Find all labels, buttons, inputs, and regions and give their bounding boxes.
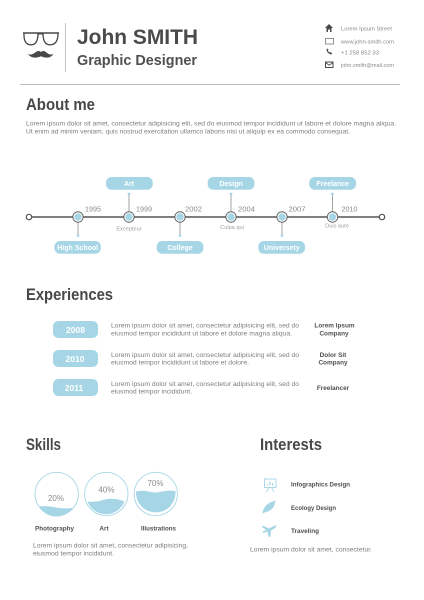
heading: about me: About me [26,96,95,114]
timeline years [85,204,358,214]
about text: Ut enim ad minim veniam, quis nostrud exercitation ullamco laboris nisi ut aliquip ex ea commodo consequat. [26,128,350,136]
pill: freelance [309,177,356,190]
interests list [262,479,350,537]
timeline years: 2010 [342,204,358,214]
experience 2010: eiusmod tempor incididunt ut labore et dolore. [111,360,249,366]
skill: illustrations 70% [134,472,178,532]
pill: design [208,177,254,190]
contact: website: www.john-smith.com [340,40,394,46]
experience 2008: eiusmod tempor incididunt ut labore et dolore magna aliqua. [111,330,292,337]
timeline axis [31,216,380,218]
experience 2011 [53,379,350,396]
timeline years: 2007 [288,204,306,214]
experience 2011: eiusmod tempor incididunt. [111,389,192,396]
skill: art 40%: 40% [98,486,115,494]
experience 2008: Lorem ipsum dolor sit amet, consectetur adipisicing elit, sed do [111,322,299,330]
experience 2011: Lorem ipsum dolor sit amet, consectetur adipisicing elit, sed do [111,381,299,388]
heading: skills: Skills [26,436,61,454]
pill: high school [54,241,101,254]
experience 2011: Freelancer [317,385,350,392]
pill: freelance: Freelance [316,181,349,188]
about text [26,120,396,136]
experience 2008 [53,321,355,338]
job title: Graphic Designer [77,52,197,69]
skill: art 40%: Art [99,526,109,532]
icon: mail [326,62,333,68]
heading: interests: Interests [260,436,322,454]
icon: presentation board [264,479,276,492]
interest: ecology design: Ecology Design [291,505,336,512]
icon: phone [326,48,332,54]
experience rows [53,321,355,396]
skill: illustrations 70%: Illustrations [141,526,176,532]
experience 2008: Company [319,330,349,337]
pill: college [157,241,203,254]
pill: college: College [167,245,193,252]
pill: art: Art [124,181,135,188]
skills text: eiusmod tempor incididunt. [33,550,114,557]
experience 2010: 2010 [66,354,85,364]
timeline captions: Duis aute [325,224,349,230]
contact: street: Lorem Ipsum Street [341,26,392,32]
contact: email: john.smith@mail.com [340,63,394,69]
skill: photography 20%: Photography [35,526,74,532]
interest: traveling: Traveling [291,528,319,535]
pill: art [106,177,153,190]
icon: airplane [262,525,276,537]
connector dots [77,193,334,237]
skills text: Lorem ipsum dolor sit amet, consectetur adipisicing, [33,542,188,550]
timeline captions [116,224,349,232]
experience 2010: Dolor Sit [320,352,347,359]
skill: art 40% [85,472,128,532]
timeline captions: Excepteur [116,226,142,232]
skill: photography 20%: 20% [48,494,64,503]
experience 2010: Company [318,360,348,366]
timeline years: 2004 [238,204,255,214]
header rule [20,83,400,86]
timeline years: 1995 [85,204,101,214]
timeline years: 2002 [185,204,202,214]
pill: university: Universety [264,245,300,252]
timeline nodes [73,212,338,222]
header divider [64,23,67,72]
timeline years: 1999 [136,204,152,214]
icon: leaf [262,500,276,514]
skill: illustrations 70%: 70% [147,479,164,488]
experience 2008: Lorem Ipsum [314,322,355,330]
timeline captions: Culpa qui [220,225,244,231]
about text: Lorem ipsum dolor sit amet, consectetur adipisicing elit, sed do eiusmod tempor incididunt ut labore et dolore magna aliqua. [26,120,396,128]
pill: university [258,241,305,254]
pill: high school: High School [57,245,98,252]
heading: experiences: Experiences [26,286,113,304]
contact: phone: +1 258 852 33 [341,50,379,56]
interest: infographics design: Infographics Design [291,482,350,488]
pill: design: Design [219,181,243,188]
icon: glasses and moustache [23,33,59,58]
timeline ends [26,214,385,220]
contact block [325,24,394,69]
connectors [78,194,332,235]
timeline [26,177,385,254]
experience 2011: 2011 [65,383,83,393]
skill: photography 20% [35,472,78,532]
icon: laptop [326,38,334,44]
name: John SMITH [77,25,198,49]
skills charts [35,472,178,532]
skills text [33,542,188,557]
icon: home [325,24,333,32]
experience 2008: 2008 [66,325,85,335]
interests text: Lorem ipsum dolor sit amet, consectetur. [250,547,372,554]
experience 2010: Lorem ipsum dolor sit amet, consectetur adipisicing elit, sed do [111,352,299,359]
experience 2010 [53,350,348,367]
